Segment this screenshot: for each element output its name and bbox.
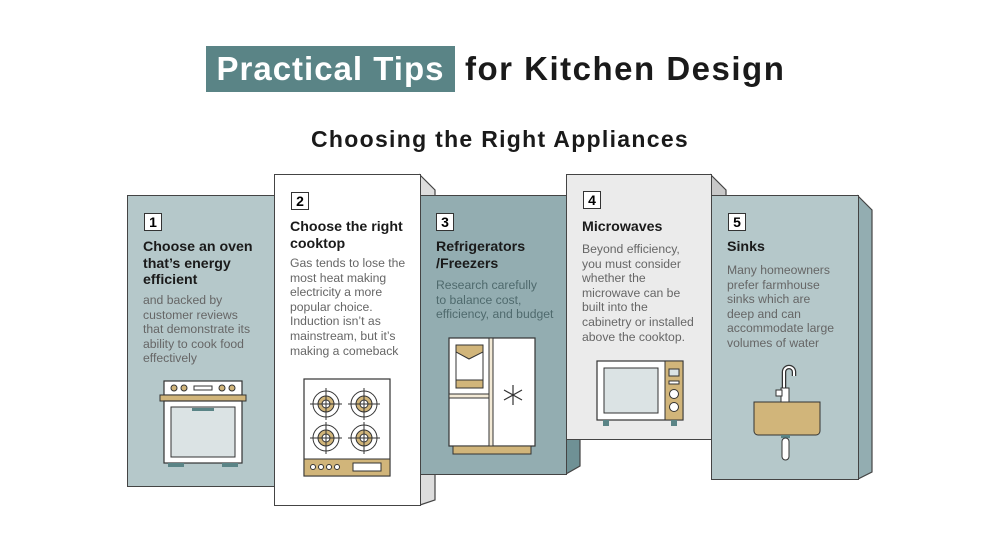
panel 4: microwave: cabinetry or installed <box>582 315 694 329</box>
panel 1: oven: that demonstrate its <box>143 322 250 336</box>
icon: cooktop <box>303 378 391 477</box>
panel 4: microwave: built into the <box>582 300 648 314</box>
panel 5: sink: accommodate large <box>727 321 834 335</box>
panel 1: oven: Choose an oven <box>143 239 253 255</box>
panel 4: microwave: above the cooktop. <box>582 330 685 344</box>
panel 2: cooktop: electricity a more <box>290 285 382 299</box>
subtitle: Choosing the Right Appliances <box>311 126 689 152</box>
panel 5: sink: prefer farmhouse <box>727 278 820 292</box>
title highlight box: Practical Tips <box>216 50 444 87</box>
panel 5: sink: volumes of water <box>727 336 819 350</box>
panel 5: sink: deep and can <box>727 307 801 321</box>
panel 4: microwave: Beyond efficiency, <box>582 242 680 256</box>
icon: oven <box>160 380 246 467</box>
panel 2: cooktop: Gas tends to lose the <box>290 256 405 270</box>
panel 3: fridge <box>420 195 567 475</box>
panel 3: fridge: 3 <box>441 214 449 230</box>
panel 1: oven: and backed by <box>143 293 222 307</box>
panel 4: microwave: microwave can be <box>582 286 680 300</box>
panel 2: cooktop: Induction isn’t as <box>290 314 381 328</box>
panel 2: cooktop: cooktop <box>290 236 345 252</box>
panel 2: cooktop: making a comeback <box>290 344 398 358</box>
panel 2: cooktop: popular choice. <box>290 300 373 314</box>
panel 3: fridge: to balance cost, <box>436 293 521 307</box>
panel 5: sink: Many homeowners <box>727 263 830 277</box>
panel 4: microwave: whether the <box>582 271 646 285</box>
panel 2: cooktop: 2 <box>296 193 304 209</box>
panel 3: fridge: Refrigerators <box>436 239 525 255</box>
icon: microwave <box>596 360 684 426</box>
panel 5: sink: 5 <box>733 214 741 230</box>
panel 1: oven <box>127 195 276 487</box>
icon: fridge <box>448 337 536 454</box>
panel 2: cooktop: most heat making <box>290 271 386 285</box>
panel 5: sink <box>711 195 859 480</box>
panel 2: cooktop: Choose the right <box>290 219 403 235</box>
panel 4: microwave: you must consider <box>582 257 681 271</box>
panel 2: cooktop <box>274 174 421 506</box>
panel 1: oven: efficient <box>143 272 197 288</box>
panel 1: oven: ability to cook food <box>143 337 244 351</box>
title: for Kitchen Design <box>465 50 785 87</box>
panel 1: oven: that’s energy <box>143 256 231 272</box>
panel 1: oven: customer reviews <box>143 308 238 322</box>
panel 4: microwave: 4 <box>588 192 596 208</box>
icon: sink <box>754 364 820 460</box>
panel 1: oven: 1 <box>149 214 157 230</box>
title <box>206 46 785 92</box>
panel 4: microwave: Microwaves <box>582 219 662 235</box>
panel 4: microwave <box>566 174 712 440</box>
panel 3: fridge: efficiency, and budget <box>436 307 553 321</box>
panel 5: sink: sinks which are <box>727 292 810 306</box>
panel 1: oven: effectively <box>143 351 197 365</box>
panel 3: fridge: Research carefully <box>436 278 537 292</box>
panel 2: cooktop: mainstream, but it’s <box>290 329 395 343</box>
panel 3: fridge: /Freezers <box>436 256 498 272</box>
panel 5: sink: Sinks <box>727 239 765 255</box>
